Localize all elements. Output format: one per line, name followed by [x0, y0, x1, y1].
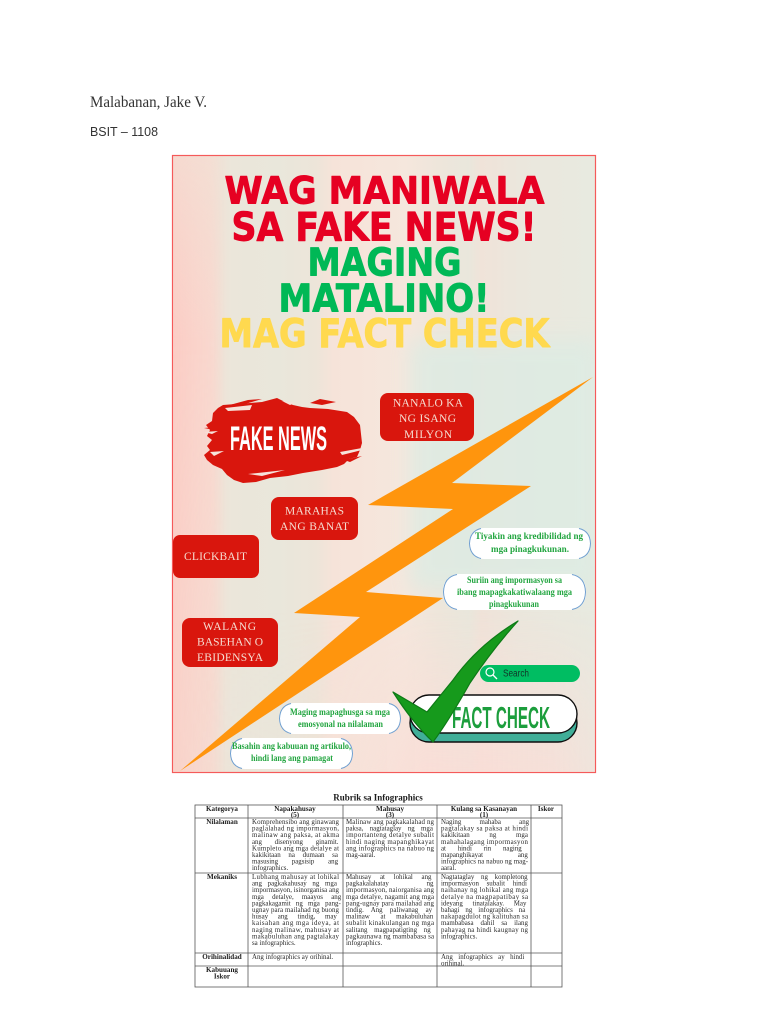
- tip: basahin ang kabuuan: hindi lang ang pamagat: [251, 753, 333, 763]
- column: kulang sa kasanayan text: Naging mahaba ang: [441, 819, 530, 826]
- table header row: Kulang sa Kasanayan: [451, 805, 517, 813]
- column: napakahusay text: pagkakagamit ng mga pang-: [252, 900, 341, 907]
- heading: maging matalino: [278, 240, 490, 322]
- row labels: Iskor: [214, 972, 230, 980]
- column: kulang sa kasanayan text: nakapagdulot ng kalituhan sa: [441, 914, 528, 921]
- column: kulang sa kasanayan text: impormasyon subalit hindi: [441, 881, 527, 888]
- rubric title: Rubrik sa Infographics: [333, 792, 423, 802]
- column: mahusay text: Mahusay at lohikal ang: [346, 874, 432, 881]
- table header row: Iskor: [538, 805, 554, 813]
- panel: poster: [172, 156, 600, 772]
- tip: suriin ang impormasyon: [443, 574, 586, 610]
- column: mahusay text: Malinaw ang pagkakalahad ng: [346, 819, 435, 826]
- column: napakahusay text: ang pagkakahusay ng mga: [252, 881, 337, 888]
- column: kulang sa kasanayan text: mahahalagang impormasyon: [441, 839, 529, 846]
- column: napakahusay text: ang disenyong ginamit.: [252, 839, 339, 846]
- callout: clickbait: [173, 535, 259, 578]
- callout: walang basehan o ebidensya: [182, 618, 278, 667]
- column: napakahusay text: impormasyon, isinorganisa ang: [252, 887, 340, 894]
- column: mahusay text: subalit kinakulangan ng mga: [346, 920, 434, 927]
- table grid: [195, 805, 562, 987]
- icon: orange lightning bolt: [180, 377, 593, 771]
- column: napakahusay text: ugnay para mailahad ng buong: [252, 907, 340, 914]
- column: napakahusay text: paglalahad ng impormasyon,: [252, 826, 339, 833]
- callout: clickbait: CLICKBAIT: [184, 551, 247, 563]
- column: napakahusay text: mga detalye, maayos ang: [252, 894, 342, 901]
- heading: maging matalino: MAGING: [308, 240, 462, 286]
- column: kulang sa kasanayan text: infographics na nabuo ng mag-: [441, 859, 529, 866]
- table header row: (3): [386, 811, 395, 819]
- column: kulang sa kasanayan text: orihinal.: [441, 960, 464, 967]
- search bar: Search: [503, 668, 529, 680]
- column: napakahusay text: Ang infographics ay orihinal.: [252, 954, 333, 961]
- title: wag maniwala sa fake news: WAG MANIWALA: [224, 168, 544, 212]
- column: kulang sa kasanayan text: pahayag na hindi kaugnay ng: [441, 927, 529, 934]
- icon: fake news brush stamp: [204, 398, 362, 483]
- title: wag maniwala sa fake news: SA FAKE NEWS!: [232, 206, 536, 250]
- column: mahusay text: infographics.: [346, 940, 382, 947]
- row labels: Nilalaman: [206, 818, 238, 826]
- fact check button: [410, 695, 577, 742]
- column: mahusay text: importanteng detalye subalit: [346, 832, 434, 839]
- column: napakahusay text: husay ang tindig, may: [252, 914, 337, 921]
- column: mahusay text: pagkakalahatay ng: [346, 881, 434, 888]
- tip: tiyakin ang kredibilidad: mga pinagkukunan.: [491, 544, 569, 554]
- callout: nanalo ka ng isang milyon: MILYON: [404, 429, 453, 441]
- column: napakahusay text: kaisahan ang mga ideya, at: [252, 920, 339, 927]
- column: napakahusay text: [252, 819, 342, 961]
- table header row: [206, 805, 554, 819]
- table header row: Mahusay: [376, 805, 404, 813]
- heading: mag fact check: MAG FACT CHECK: [220, 312, 551, 357]
- column: mahusay text: hindi naging mapanghikayat: [346, 839, 434, 846]
- column: mahusay text: tindig. Ang paliwanag ay: [346, 907, 433, 914]
- column: mahusay text: ang infographics na nabuo ng: [346, 845, 435, 852]
- column: napakahusay text: kakikitaan na dumaan sa: [252, 852, 338, 859]
- tip: suriin ang impormasyon: pinagkukunan: [489, 599, 539, 609]
- column: kulang sa kasanayan text: Ang infographics ay hindi: [441, 954, 524, 961]
- row labels: [202, 818, 242, 980]
- column: kulang sa kasanayan text: at hindi rin naging: [441, 845, 522, 852]
- column: kulang sa kasanayan text: ideyang tinatalakay. May: [441, 900, 527, 907]
- column: napakahusay text: makabuluhan ang pagtalakay: [252, 933, 340, 940]
- table header row: (5): [291, 811, 300, 819]
- column: napakahusay text: malinaw ang paksa, at akma: [252, 832, 339, 839]
- title: wag maniwala sa fake news: [224, 168, 544, 250]
- panel: rubric table: [195, 792, 562, 987]
- table header row: Kategorya: [206, 805, 238, 813]
- callout: marahas ang banat: MARAHAS: [285, 506, 344, 518]
- column: kulang sa kasanayan text: Nagtataglay ng kompletong: [441, 874, 528, 881]
- icon: fake news brush stamp: FAKE NEWS: [230, 420, 327, 458]
- column: mahusay text: salitang magpapatigting ng: [346, 927, 431, 934]
- search bar: [480, 665, 580, 682]
- column: kulang sa kasanayan text: [441, 819, 530, 967]
- callout: marahas ang banat: ANG BANAT: [280, 521, 349, 533]
- heading: maging matalino: MATALINO!: [278, 276, 490, 322]
- column: napakahusay text: infographics.: [252, 865, 288, 872]
- tip: maging mapaghusga: [279, 703, 401, 734]
- tip: maging mapaghusga: emosyonal na nilalaman: [298, 719, 383, 729]
- callout: walang basehan o ebidensya: EBIDENSYA: [197, 652, 264, 664]
- column: kulang sa kasanayan text: kakikitaan ng mga: [441, 832, 528, 839]
- column: kulang sa kasanayan text: bahagi ng infographics na: [441, 907, 525, 914]
- column: mahusay text: malinaw at makabuluhan: [346, 914, 434, 921]
- column: mahusay text: pagkaunawa ng mambabasa sa: [346, 933, 434, 940]
- callout: nanalo ka ng isang milyon: [380, 393, 474, 441]
- tip: tiyakin ang kredibilidad: [469, 528, 591, 559]
- tip: suriin ang impormasyon: ibang mapagkakatiwalaang mga: [457, 587, 572, 597]
- column: kulang sa kasanayan text: aaral.: [441, 865, 456, 872]
- icon: green check mark: [393, 621, 518, 742]
- tip: basahin ang kabuuan: Basahin ang kabuuan ng artikulo,: [232, 741, 351, 751]
- table header row: Napakahusay: [274, 805, 316, 813]
- table header row: (1): [480, 811, 489, 819]
- fact check button: FACT CHECK: [452, 700, 550, 735]
- column: napakahusay text: masusing pagsisip ang: [252, 859, 339, 866]
- column: napakahusay text: naging malinaw, mahusay at: [252, 927, 339, 934]
- column: napakahusay text: Kumpleto ang mga detalye at: [252, 845, 339, 852]
- callout: marahas ang banat: [271, 497, 358, 540]
- column: kulang sa kasanayan text: detalye na magpapatibay sa: [441, 894, 528, 901]
- column: mahusay text: mga detalye, nagamit ang mga: [346, 894, 434, 901]
- column: kulang sa kasanayan text: naihanay ng lohikal ang mga: [441, 887, 528, 894]
- tip: tiyakin ang kredibilidad: Tiyakin ang kredibilidad ng: [475, 531, 584, 541]
- column: kulang sa kasanayan text: mambabasa dahil sa ilang: [441, 920, 528, 927]
- column: mahusay text: paksa, nagtataglay ng mga: [346, 826, 433, 833]
- column: napakahusay text: Komprehensibo ang ginawang: [252, 819, 340, 826]
- column: napakahusay text: sa infographics.: [252, 940, 296, 947]
- row labels: Orihinalidad: [202, 953, 242, 961]
- tip: suriin ang impormasyon: Suriin ang impormasyon sa: [467, 575, 562, 585]
- callout: walang basehan o ebidensya: WALANG: [203, 621, 256, 633]
- callout: walang basehan o ebidensya: BASEHAN O: [197, 636, 263, 648]
- column: mahusay text: impormasyon, naiorganisa ang: [346, 887, 435, 894]
- tip: basahin ang kabuuan: [230, 738, 353, 769]
- column: kulang sa kasanayan text: infographics.: [441, 933, 477, 940]
- course and section: BSIT – 1108: [90, 124, 158, 139]
- callout: nanalo ka ng isang milyon: NG ISANG: [399, 413, 456, 425]
- row labels: Kabuuang: [206, 966, 238, 974]
- tip: maging mapaghusga: Maging mapaghusga sa mga: [290, 707, 390, 717]
- column: kulang sa kasanayan text: mapanghikayat ang: [441, 852, 528, 859]
- row labels: Mekaniks: [207, 873, 237, 881]
- callout: nanalo ka ng isang milyon: NANALO KA: [393, 398, 464, 410]
- column: mahusay text: [346, 819, 435, 947]
- column: mahusay text: pang-ugnay para mailahad ang: [346, 900, 435, 907]
- column: kulang sa kasanayan text: pagtalakay sa paksa at hindi: [441, 826, 528, 833]
- column: mahusay text: mag-aaral.: [346, 852, 376, 859]
- column: napakahusay text: Lubhang mahusay at lohikal: [252, 874, 339, 881]
- author name: Malabanan, Jake V.: [90, 94, 207, 111]
